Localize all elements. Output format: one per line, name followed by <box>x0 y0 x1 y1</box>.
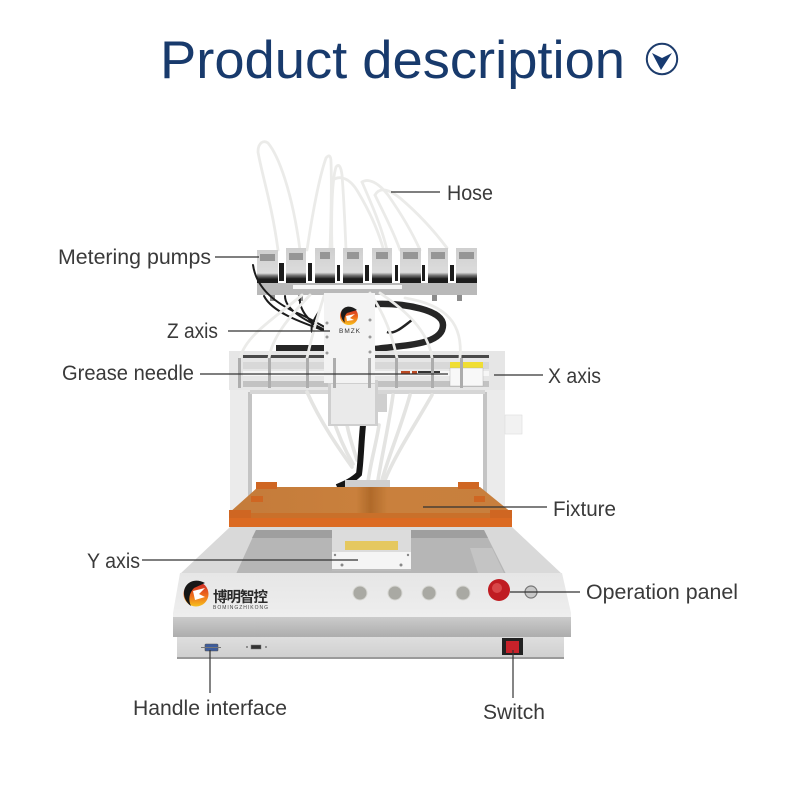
label: Grease needle: Grease needle <box>62 362 194 385</box>
Y axis slider <box>332 530 411 571</box>
handle port <box>201 644 221 651</box>
cable bundle <box>337 425 363 487</box>
lower hoses fan <box>307 392 432 482</box>
metering pumps <box>257 248 477 301</box>
label: Hose <box>391 182 493 205</box>
control knobs <box>353 586 470 600</box>
label: Switch: Switch <box>483 701 545 724</box>
label: Handle interface: Handle interface <box>133 697 287 720</box>
brand logo on panel: BOMINGZHIKONG <box>213 605 268 611</box>
label: Z axis: Z axis <box>167 320 218 343</box>
label: Metering pumps: Metering pumps <box>58 246 211 269</box>
BMZK logo: BMZK <box>339 328 361 335</box>
label: X axis: X axis <box>548 365 601 388</box>
pump mounting bar <box>257 283 477 295</box>
indicator knob <box>525 586 537 598</box>
Z axis carriage <box>324 293 387 426</box>
brand logo on panel: 博明智控 <box>213 586 268 607</box>
label: X axis <box>494 365 601 388</box>
title: Product description <box>160 31 625 90</box>
pump bodies <box>257 248 477 283</box>
black wiring and drag chain <box>253 265 443 351</box>
red emergency button <box>488 579 510 601</box>
base top surface <box>180 527 562 574</box>
brand logo on panel <box>184 581 268 611</box>
label: Y axis: Y axis <box>87 550 140 573</box>
USB port <box>246 645 267 649</box>
upper hoses <box>258 142 447 255</box>
label: Switch <box>483 650 545 724</box>
fixture plate <box>229 482 512 527</box>
label: Hose: Hose <box>447 182 493 205</box>
machine photo <box>173 142 571 659</box>
label: Operation panel: Operation panel <box>586 581 738 604</box>
base body <box>173 573 571 659</box>
label: Fixture: Fixture <box>553 498 616 521</box>
fixture mount <box>345 480 390 488</box>
power switch <box>502 638 523 655</box>
icon: chevron-down circle <box>647 44 677 74</box>
frame legs and crossbar <box>230 385 522 520</box>
grease needles <box>238 358 463 388</box>
hoses to needles <box>240 293 460 358</box>
X axis beam <box>229 351 505 390</box>
